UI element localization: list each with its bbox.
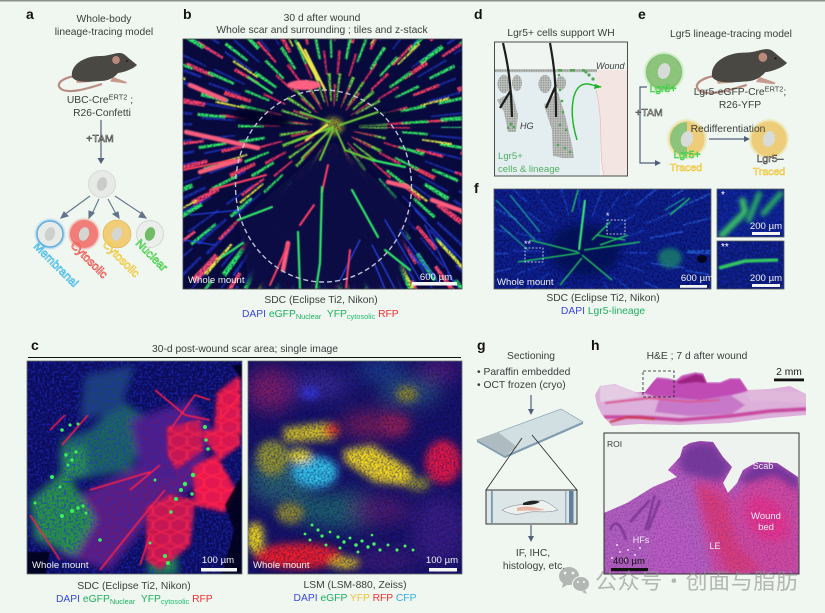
label Redifferentiation: Redifferentiation (691, 124, 766, 135)
panel a: whole-body lineage tracing (26, 6, 170, 290)
zoom lines (486, 435, 577, 490)
channel legend: Nuclear (296, 312, 322, 321)
heading d: Lgr5+ cells support WH (507, 28, 615, 39)
captions left: RFP (189, 594, 213, 605)
captions left (56, 581, 213, 606)
heading h: H&E ; 7 d after wound (647, 351, 748, 362)
ROI box on section (643, 371, 674, 397)
scale bar: 100 µm (202, 555, 234, 566)
bullets: • Paraffin embedded (477, 367, 571, 378)
heading g: Sectioning (507, 351, 555, 362)
ROI labels: Wound (751, 511, 781, 522)
captions left: cytosolic (161, 597, 190, 606)
schematic: skin and wound (494, 42, 628, 176)
panel e: Lgr5 lineage tracing (635, 6, 792, 178)
schematic: skin and wound: HG (520, 121, 534, 131)
source cell (88, 170, 116, 198)
rediff arrow (709, 136, 750, 142)
cell: Lgr5- traced (750, 120, 788, 158)
inset ** marks: ** (721, 242, 729, 253)
arrow (528, 525, 534, 542)
caption f: DAPI Lgr5-lineage (561, 306, 645, 317)
cell labels: Lgr5– (757, 153, 784, 165)
ROI markers: ** (524, 239, 532, 249)
cell labels: Traced (753, 166, 785, 178)
cell labels (670, 149, 785, 178)
arrows to clones (61, 196, 146, 218)
ROI labels: Scab (753, 461, 773, 471)
inset * marks: 200 µm (750, 221, 782, 232)
ROI scale bar: 400 µm (613, 556, 645, 567)
cell labels: Lgr5+ (673, 149, 701, 161)
icon: wechat (559, 567, 590, 594)
red membrane cell sheets (146, 375, 242, 570)
arrow: tamoxifen (98, 120, 104, 164)
whole mount tag: Whole mount (497, 277, 554, 288)
scale bar: 600 µm (420, 272, 452, 283)
channel legend: RFP (375, 309, 399, 320)
captions right (294, 580, 417, 604)
watermark (559, 564, 798, 596)
genotype label: ; (127, 95, 133, 106)
caption f: SDC (Eclipse Ti2, Nikon) (546, 293, 660, 304)
glass slide (477, 409, 583, 458)
inset ** (717, 241, 784, 289)
scar boundary circle (236, 90, 412, 282)
micrograph: radial lineage streaks (183, 39, 462, 289)
captions right: DAPI eGFP YFP RFP CFP (294, 593, 417, 604)
scale bar: 100 µm (426, 555, 458, 566)
heading a: Whole-body (77, 14, 132, 25)
icon: mouse (697, 49, 787, 93)
genotype label: Lgr5-eGFP-Cre (694, 87, 765, 98)
channel legend: cytosolic (347, 312, 376, 321)
arrow (528, 395, 534, 415)
captions left: Nuclear (110, 597, 136, 606)
ROI labels (607, 439, 781, 551)
label Lgr5+: Lgr5+ (649, 83, 677, 95)
genotype label: ERT2 (765, 84, 783, 94)
genotype label: UBC-Cre (67, 95, 109, 106)
inset * marks (717, 189, 784, 237)
label g: g (477, 337, 486, 353)
label d: d (474, 6, 483, 22)
micrograph: LSM (245, 360, 468, 574)
microscope caption: SDC (Eclipse Ti2, Nikon) (264, 295, 378, 306)
panel f: Lgr5 lineage whole mount (474, 183, 784, 316)
schematic: skin and wound: Lgr5+ (498, 151, 523, 162)
inset ** marks (717, 241, 784, 289)
genotype label: ; (783, 87, 786, 98)
inset * (717, 189, 784, 237)
clone labels: Cytosolic (100, 239, 142, 280)
TAM label: +TAM (635, 107, 663, 119)
confetti cells (35, 218, 164, 250)
panel g: sectioning (477, 337, 583, 572)
cell: Lgr5+ (644, 52, 684, 92)
micrograph: whole mount (494, 189, 711, 289)
whole mount tag: Whole mount (253, 560, 310, 571)
schematic: skin and wound: cells & lineage (498, 164, 560, 175)
whole mount tag: Whole mount (32, 560, 89, 571)
ROI scale bar (611, 556, 648, 571)
ROI labels: ROI (607, 439, 622, 449)
applications: histology, etc. (503, 561, 565, 572)
schematic: skin and wound: Wound (596, 61, 626, 71)
inset ** marks: 200 µm (750, 273, 782, 284)
genotype label: ERT2 (109, 92, 127, 102)
whole section (595, 372, 806, 426)
genotype label: R26-Confetti (73, 108, 131, 119)
heading c: 30-d post-wound scar area; single image (152, 344, 338, 355)
captions left: SDC (Eclipse Ti2, Nikon) (77, 581, 191, 592)
captions right: LSM (LSM-880, Zeiss) (304, 580, 406, 591)
TAM label: +TAM (86, 133, 114, 145)
panel c: single image scar area (27, 337, 468, 606)
ROI labels: bed (758, 522, 774, 533)
enlarged section (486, 490, 577, 524)
cell labels: Traced (670, 162, 702, 174)
heading e: Lgr5 lineage-tracing model (670, 29, 792, 40)
label f: f (474, 180, 479, 196)
ROI markers (524, 211, 610, 249)
genotype label: R26-YFP (719, 100, 761, 111)
ROI markers: * (606, 211, 610, 221)
ROI labels: LE (709, 541, 721, 551)
scale bar: 2 mm (776, 367, 802, 378)
ROI labels: HFs (633, 535, 650, 545)
inset * marks: * (721, 190, 725, 201)
panel d: Lgr5+ cells support WH (474, 6, 628, 176)
scale bar (201, 555, 237, 572)
applications: IF, IHC, (516, 548, 550, 559)
label h: h (591, 337, 600, 353)
whole mount tag: Whole mount (188, 275, 245, 286)
heading b: Whole scar and surrounding ; tiles and z-stack (216, 25, 428, 36)
captions left: YFP (135, 594, 161, 605)
clone labels: Cytosolic (68, 240, 110, 281)
wound centre cluster (322, 117, 344, 135)
label a: a (26, 6, 34, 22)
heading a: lineage-tracing model (55, 27, 153, 38)
panel h: H&E (590, 337, 810, 574)
ROI image (604, 433, 799, 574)
clone labels: Membranal (31, 241, 80, 290)
clone labels (31, 238, 170, 290)
caption f (546, 293, 660, 317)
panel b: whole mount scar (182, 9, 462, 320)
clone labels: Nuclear (133, 238, 170, 274)
watermark text: 公众号·创面与脂肪 (595, 564, 798, 596)
heading b: 30 d after wound (284, 13, 361, 24)
label e: e (638, 6, 646, 22)
bracket arrow (640, 87, 661, 166)
scale bar (412, 272, 457, 286)
label c: c (31, 337, 39, 353)
dark lower scar region (238, 140, 412, 289)
label b: b (183, 6, 192, 22)
scale bar (426, 555, 458, 572)
cell: Lgr5+ traced (668, 120, 706, 158)
micrograph: SDC (27, 361, 242, 574)
scale bar: 600 µm (681, 273, 713, 284)
ROI boxes (525, 220, 625, 262)
scale bar (774, 367, 804, 381)
captions left: DAPI eGFP (56, 594, 110, 605)
bullets: • OCT frozen (cryo) (477, 380, 566, 391)
channel legend: DAPI eGFP (242, 309, 296, 320)
icon: mouse (59, 53, 137, 91)
channel legend: YFP (321, 309, 347, 320)
